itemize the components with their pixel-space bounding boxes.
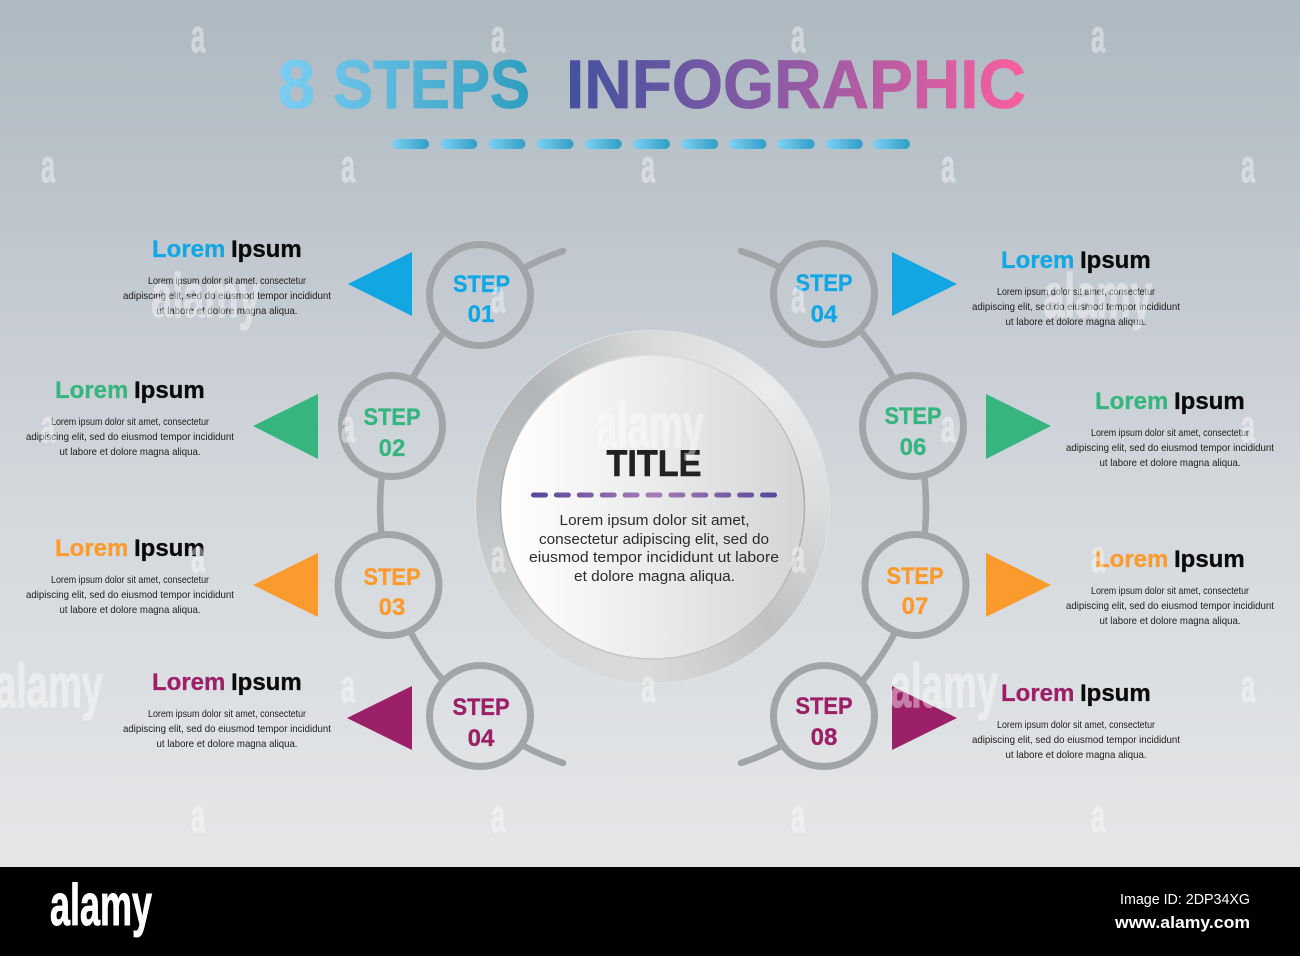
text block: step 03: ut labore et dolore magna aliqua. — [60, 604, 200, 616]
watermarks: a — [341, 140, 355, 192]
watermarks: a — [791, 790, 805, 842]
step 04 right: STEP — [796, 270, 852, 297]
step 01 — [348, 244, 530, 346]
text block: step 03: Ipsum — [134, 535, 205, 562]
text block: step 04 left: adipiscing elit, sed do eiusmod tempor incididunt — [123, 723, 331, 735]
left connecting arc — [380, 251, 563, 763]
step 07: STEP — [886, 563, 944, 590]
step 06: STEP — [884, 403, 942, 430]
central dashes — [531, 492, 777, 498]
step 07 — [865, 534, 1051, 636]
text block: step 04 left: Lorem — [152, 669, 225, 696]
watermarks: a — [191, 10, 205, 62]
title: INFOGRAPHIC — [566, 46, 1026, 123]
step 07: 07 — [902, 593, 928, 620]
step 01: 01 — [468, 301, 494, 328]
central paragraph: Lorem ipsum dolor sit amet, — [560, 512, 750, 529]
title: 8 — [278, 46, 315, 123]
text block: step 04 right: adipiscing elit, sed do eiusmod tempor incididunt — [972, 301, 1180, 313]
text block: step 08 — [972, 680, 1180, 761]
image id: Image ID: 2DP34XG — [1120, 891, 1250, 908]
text block: step 07: Lorem — [1095, 546, 1168, 573]
text block: step 03: Lorem ipsum dolor sit amet, consectetur — [51, 574, 209, 586]
text block: step 02: adipiscing elit, sed do eiusmod tempor incididunt — [26, 431, 234, 443]
step 08: 08 — [811, 724, 837, 751]
watermarks: a — [791, 270, 805, 322]
watermarks: a — [1241, 400, 1255, 452]
text block: step 01: Ipsum — [231, 236, 302, 263]
watermarks: a — [941, 140, 955, 192]
step 04 right — [774, 244, 957, 344]
title: STEPS — [333, 46, 530, 123]
text block: step 08: Lorem — [1001, 680, 1074, 707]
text block: step 02: Lorem — [55, 377, 128, 404]
watermarks: alamy — [151, 262, 260, 331]
text block: step 04 right: Ipsum — [1080, 247, 1151, 274]
text block: step 03: Lorem — [55, 535, 128, 562]
text block: step 06: Lorem ipsum dolor sit amet, consectetur — [1091, 427, 1249, 439]
step 03 — [253, 534, 439, 636]
watermarks: a — [341, 400, 355, 452]
text block: step 04 left: Lorem ipsum dolor sit amet, consectetur — [148, 708, 306, 720]
watermarks: a — [191, 790, 205, 842]
text block: step 06: Lorem — [1095, 388, 1168, 415]
central heading: TITLE — [606, 443, 702, 484]
step 03: STEP — [364, 564, 420, 591]
text block: step 07: Lorem ipsum dolor sit amet, consectetur — [1091, 585, 1249, 597]
central paragraph: eiusmod tempor incididunt ut labore — [529, 549, 779, 566]
watermarks: a — [41, 400, 55, 452]
central paragraph: consectetur adipiscing elit, sed do — [539, 531, 769, 548]
watermarks: a — [641, 660, 655, 712]
watermarks: a — [491, 10, 505, 62]
text block: step 06: adipiscing elit, sed do eiusmod tempor incididunt — [1066, 442, 1274, 454]
text block: step 02: ut labore et dolore magna aliqua. — [60, 446, 200, 458]
watermarks: a — [1091, 10, 1105, 62]
watermarks: alamy — [0, 652, 103, 721]
step 04 right: 04 — [811, 301, 838, 328]
watermarks: a — [1241, 660, 1255, 712]
title — [278, 46, 1026, 123]
text block: step 04 right: Lorem ipsum dolor sit amet, consectetur — [997, 286, 1155, 298]
watermarks: a — [341, 660, 355, 712]
step 02 — [253, 376, 442, 476]
central circle — [475, 330, 830, 684]
text block: step 06 — [1066, 388, 1274, 469]
watermarks: a — [491, 270, 505, 322]
text block: step 03 — [26, 535, 234, 616]
text block: step 04 left: Ipsum — [231, 669, 302, 696]
text block: step 04 right: ut labore et dolore magna aliqua. — [1006, 316, 1146, 328]
text block: step 08: adipiscing elit, sed do eiusmod tempor incididunt — [972, 734, 1180, 746]
text block: step 07: adipiscing elit, sed do eiusmod tempor incididunt — [1066, 600, 1274, 612]
text block: step 06: Ipsum — [1174, 388, 1245, 415]
right connecting arc — [741, 251, 926, 763]
watermarks: a — [641, 140, 655, 192]
text block: step 04 right — [972, 247, 1180, 328]
text block: step 07: Ipsum — [1174, 546, 1245, 573]
watermarks: a — [191, 530, 205, 582]
text block: step 03: adipiscing elit, sed do eiusmod tempor incididunt — [26, 589, 234, 601]
step 08 — [774, 666, 957, 766]
inner disc — [500, 355, 804, 659]
text block: step 08: Ipsum — [1080, 680, 1151, 707]
step 03: 03 — [379, 594, 405, 621]
step 02: STEP — [364, 404, 420, 431]
watermarks: a — [791, 10, 805, 62]
footer logo: alamy — [50, 873, 152, 938]
step 04 left: 04 — [468, 725, 495, 752]
watermarks: a — [1091, 790, 1105, 842]
step 01: STEP — [453, 271, 510, 298]
website: www.alamy.com — [1114, 913, 1250, 932]
text block: step 02: Ipsum — [134, 377, 205, 404]
footer bar — [0, 867, 1300, 956]
watermarks: alamy — [1043, 262, 1152, 331]
text block: step 01: ut labore et dolore magna aliqua. — [156, 305, 298, 317]
watermarks: a — [1241, 140, 1255, 192]
text block: step 01: adipiscing elit, sed do eiusmod tempor incididunt — [123, 290, 331, 302]
watermarks: a — [791, 530, 805, 582]
step 04 left: STEP — [452, 694, 510, 721]
text block: step 02 — [26, 377, 234, 458]
central paragraph — [529, 512, 779, 585]
title dashes — [392, 139, 910, 149]
text block: step 01: Lorem ipsum dolor sit amet, consectetur — [148, 275, 306, 287]
outer ring — [475, 330, 830, 684]
step 04 left — [347, 666, 530, 766]
step 06 — [862, 376, 1051, 476]
text block: step 01: Lorem — [152, 236, 225, 263]
watermarks: a — [41, 140, 55, 192]
central paragraph: et dolore magna aliqua. — [574, 568, 735, 585]
text block: step 08: Lorem ipsum dolor sit amet, consectetur — [997, 719, 1155, 731]
step 02: 02 — [379, 435, 405, 462]
watermarks: alamy — [890, 652, 998, 721]
text block: step 08: ut labore et dolore magna aliqua. — [1006, 749, 1146, 761]
step 06: 06 — [900, 434, 926, 461]
watermarks: alamy — [596, 392, 704, 461]
watermarks: a — [491, 530, 505, 582]
watermarks: a — [1091, 530, 1105, 582]
text block: step 07: ut labore et dolore magna aliqua. — [1100, 615, 1240, 627]
text block: step 02: Lorem ipsum dolor sit amet, consectetur — [51, 416, 209, 428]
text block: step 04 left: ut labore et dolore magna aliqua. — [156, 738, 298, 750]
watermarks: a — [491, 790, 505, 842]
watermarks: a — [941, 400, 955, 452]
step 08: STEP — [796, 693, 852, 720]
text block: step 01 — [123, 236, 331, 317]
text block: step 06: ut labore et dolore magna aliqua. — [1100, 457, 1240, 469]
text block: step 04 left — [123, 669, 331, 750]
text block: step 07 — [1066, 546, 1274, 627]
text block: step 04 right: Lorem — [1001, 247, 1074, 274]
